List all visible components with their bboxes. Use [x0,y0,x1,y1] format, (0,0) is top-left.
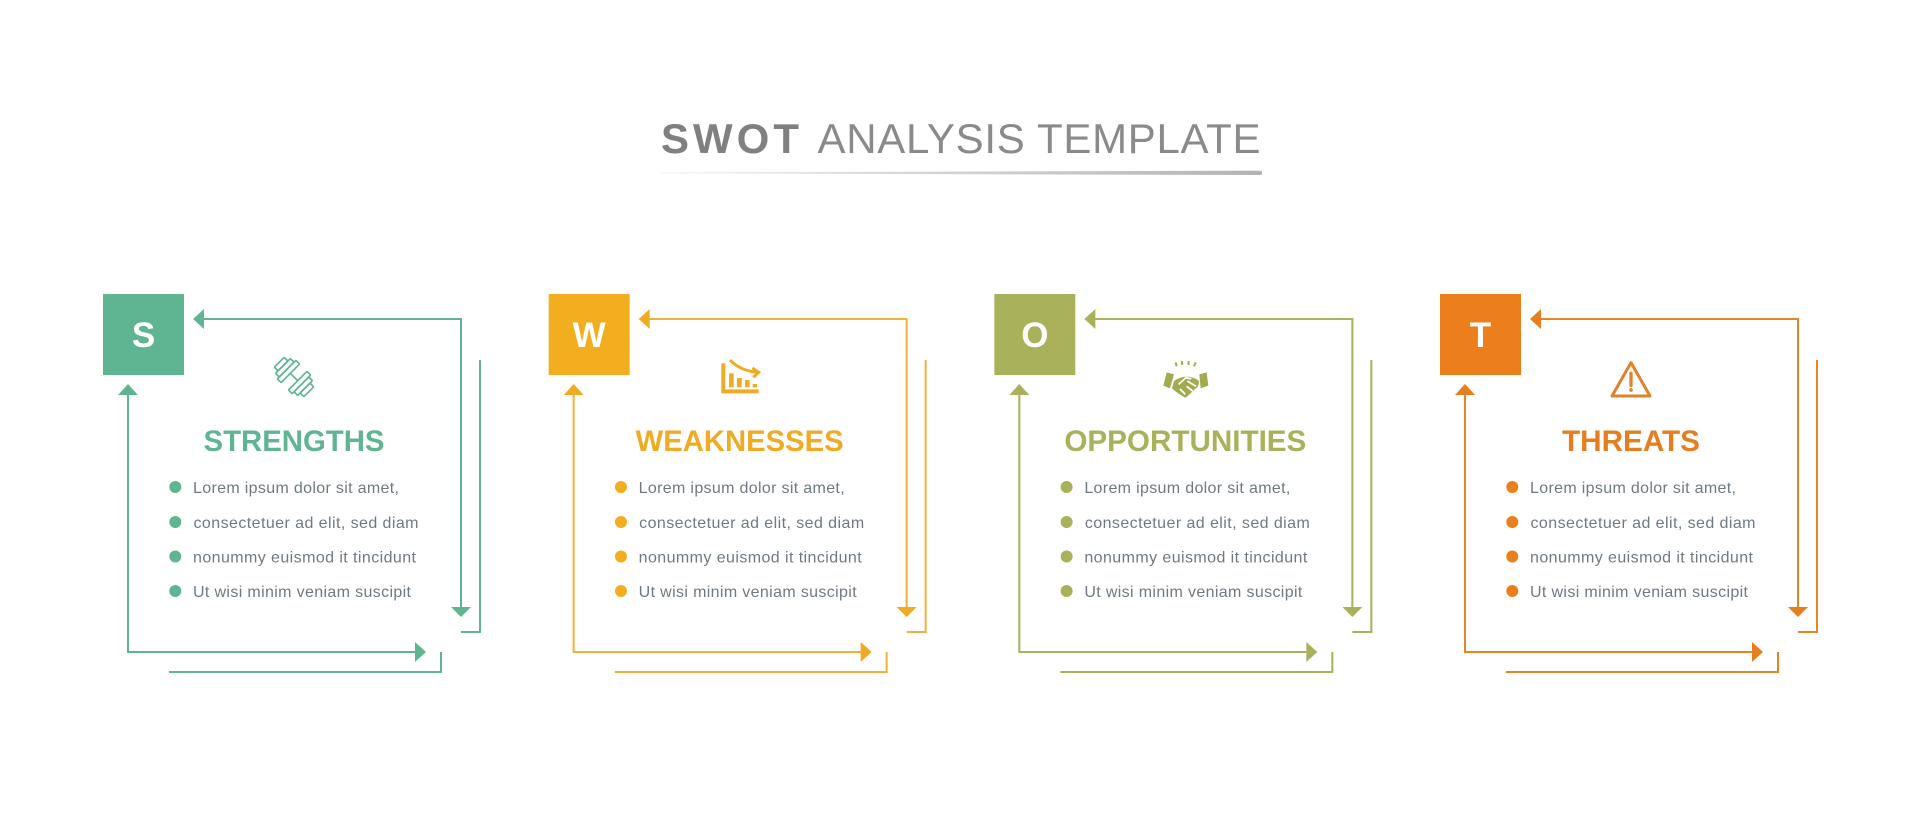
heading: OPPORTUNITIES [1064,425,1306,458]
icon: falling bar chart [723,360,759,391]
bullet list: consectetuer ad elit, sed diam [639,515,864,532]
badge W: W [573,316,606,355]
heading: STRENGTHS [204,425,384,458]
outer offset lines [1506,360,1817,672]
arrows frame [1455,309,1808,662]
bullet list [169,480,418,601]
bullet list: Ut wisi minim veniam suscipit [639,584,857,601]
bullet list [615,480,864,601]
bullet list: Ut wisi minim veniam suscipit [1084,584,1303,601]
heading: THREATS [1562,425,1700,458]
icon: dumbbell [270,353,318,401]
bullet list: Lorem ipsum dolor sit amet, [1084,480,1290,497]
badge S: S [132,316,155,355]
icon: handshake [1163,361,1208,398]
bullet list: Lorem ipsum dolor sit amet, [1530,480,1736,497]
outer offset lines [169,360,480,672]
badge T: T [1470,316,1491,355]
icon: warning triangle [1612,363,1650,396]
bullet list: nonummy euismod it tincidunt [1084,550,1308,566]
badge S [103,294,184,375]
bullet list: nonummy euismod it tincidunt [639,550,862,566]
title underline [661,171,1262,175]
panel: opportunities [994,294,1371,672]
badge T [1440,294,1521,375]
panel: strengths [103,294,480,672]
bullet list: Lorem ipsum dolor sit amet, [639,480,845,497]
title: SWOT [661,115,799,162]
title: ANALYSIS TEMPLATE [818,115,1260,162]
bullet list: nonummy euismod it tincidunt [1530,550,1754,566]
bullet list: Ut wisi minim veniam suscipit [1530,584,1749,601]
bullet list: consectetuer ad elit, sed diam [1530,515,1756,532]
bullet list: nonummy euismod it tincidunt [193,550,417,566]
bullet list [1061,480,1310,601]
bullet list: consectetuer ad elit, sed diam [194,515,418,532]
arrows frame [118,309,471,662]
bullet list [1506,480,1756,601]
bullet list: consectetuer ad elit, sed diam [1085,515,1310,532]
arrows frame [564,309,917,662]
heading: WEAKNESSES [636,425,844,458]
outer offset lines [1060,360,1371,672]
outer offset lines [615,360,926,672]
bullet list: Lorem ipsum dolor sit amet, [193,480,399,497]
panel: weaknesses [549,294,926,672]
badge W [549,294,630,375]
badge O: O [1021,316,1048,355]
badge O [994,294,1075,375]
panel: threats [1440,294,1817,672]
arrows frame [1009,309,1362,662]
bullet list: Ut wisi minim veniam suscipit [193,584,412,601]
